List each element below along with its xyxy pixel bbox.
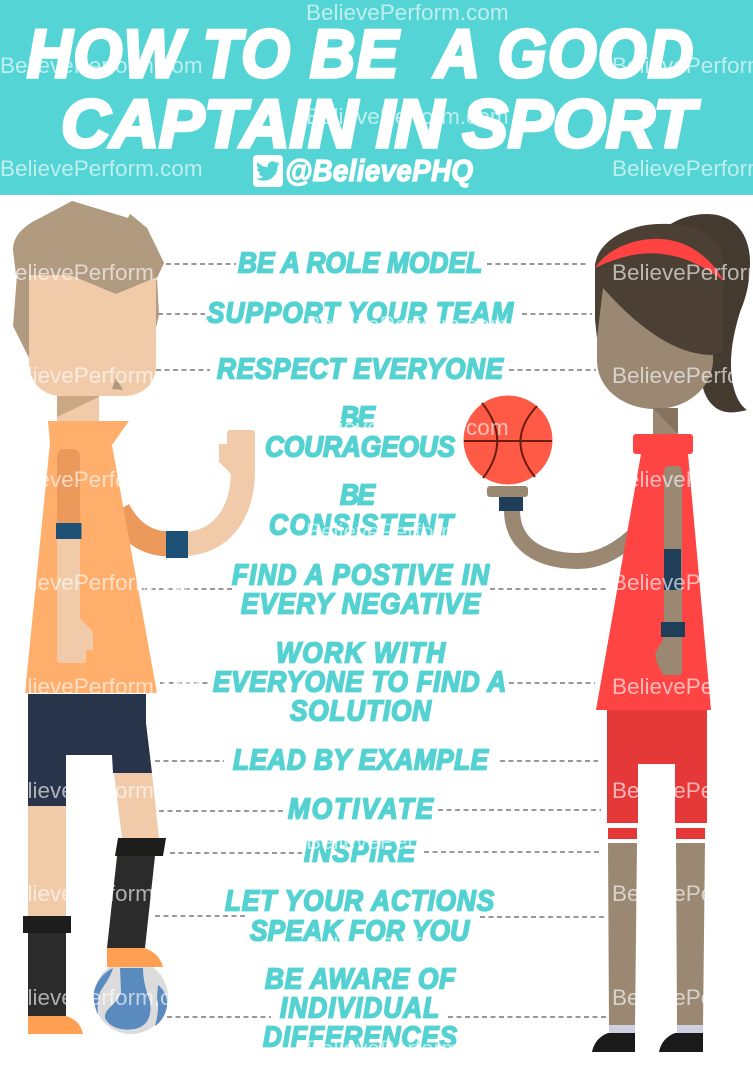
wrist band [166, 531, 188, 558]
nose [112, 378, 123, 390]
watermark: BelievePerform.com [0, 363, 203, 388]
watermark: BelievePerform.com [306, 312, 509, 337]
watermark: BelievePerform.com [0, 260, 203, 285]
orange shirt [25, 421, 157, 693]
twitter handle: @BelievePHQ [285, 154, 473, 188]
title [27, 16, 700, 162]
list of captain qualities: LET YOUR ACTIONS [225, 884, 494, 917]
watermark: BelievePerform.com [306, 104, 509, 129]
neck [57, 396, 99, 422]
raised arm [186, 445, 243, 544]
ponytail [665, 214, 750, 412]
watermark: BelievePerform.com [306, 726, 509, 751]
wrist band [499, 497, 523, 511]
short stripes [608, 828, 705, 839]
watermark: BelievePerform.com [306, 1036, 509, 1061]
list of captain qualities: FIND A POSTIVE IN [232, 558, 490, 591]
list of captain qualities: INSPIRE [304, 835, 416, 868]
red shirt [596, 454, 711, 710]
sock cuffs [23, 838, 166, 933]
dashed connector lines [142, 264, 613, 1017]
list of captain qualities: WORK WITH [276, 636, 446, 669]
raised arm sleeve [118, 510, 170, 544]
list of captain qualities: LEAD BY EXAMPLE [233, 743, 489, 776]
front hair [13, 201, 164, 294]
front hair [595, 224, 723, 355]
watermark: BelievePerform.com [306, 933, 509, 958]
figure: female captain [464, 214, 750, 1052]
title: CAPTAIN IN SPORT [61, 86, 700, 162]
shorts [28, 694, 152, 806]
lowered arm sleeve [57, 449, 80, 525]
list of captain qualities: BE AWARE OF [265, 962, 456, 995]
list of captain qualities: EVERY NEGATIVE [241, 587, 481, 620]
list of captain qualities: BE A ROLE MODEL [238, 246, 482, 279]
legs [608, 843, 705, 1026]
list of captain qualities: BE [340, 400, 376, 433]
lowered arm [655, 466, 682, 675]
soccer ball [94, 960, 168, 1034]
back of hair [13, 201, 164, 360]
list of captain qualities [207, 246, 514, 1053]
list of captain qualities: CONSISTENT [269, 508, 455, 541]
arm band [56, 523, 82, 539]
watermark: BelievePerform.com [306, 415, 509, 440]
list of captain qualities: DIFFERENCES [263, 1020, 457, 1053]
watermark: BelievePerform.com [0, 674, 203, 699]
watermark: BelievePerform.com [0, 467, 203, 492]
list of captain qualities: BE [340, 478, 376, 511]
watermark: BelievePerform.com [306, 622, 509, 647]
arm bands [661, 549, 685, 637]
list of captain qualities: SOLUTION [290, 694, 432, 727]
watermark: BelievePerform.com [306, 208, 509, 233]
legs [28, 773, 159, 917]
watermark: BelievePerform.com [0, 570, 203, 595]
palm [487, 486, 528, 497]
face [29, 262, 156, 396]
neck [653, 408, 678, 436]
shorts [607, 710, 707, 823]
list of captain qualities: SUPPORT YOUR TEAM [207, 296, 514, 329]
headband [595, 239, 724, 281]
basketball [464, 396, 552, 484]
watermark: BelievePerform.com [0, 881, 203, 906]
ankle socks [609, 1025, 703, 1033]
socks [28, 856, 155, 1016]
list of captain qualities: EVERYONE TO FIND A [213, 665, 506, 698]
figure: male captain [13, 201, 255, 1034]
list of captain qualities: SPEAK FOR YOU [250, 914, 470, 947]
lowered forearm and hand [57, 537, 93, 663]
watermark: BelievePerform.com [306, 519, 509, 544]
collar [633, 434, 693, 454]
watermark: BelievePerform.com [0, 53, 203, 78]
shoes [592, 1033, 703, 1052]
list of captain qualities: RESPECT EVERYONE [217, 352, 504, 385]
raised hand [219, 430, 255, 475]
list of captain qualities: MOTIVATE [288, 792, 434, 825]
watermark: BelievePerform.com [0, 778, 203, 803]
list of captain qualities: INDIVIDUAL [280, 991, 439, 1024]
extended arm [512, 510, 640, 561]
list of captain qualities: COURAGEOUS [265, 430, 455, 463]
face [597, 285, 713, 409]
watermark: BelievePerform.com [0, 985, 203, 1010]
watermark: BelievePerform.com [0, 156, 203, 181]
football boots [28, 948, 163, 1034]
title: HOW TO BE A GOOD [27, 16, 693, 92]
watermark: BelievePerform.com [306, 0, 509, 25]
header banner [0, 0, 753, 195]
watermark: BelievePerform.com [306, 829, 509, 854]
